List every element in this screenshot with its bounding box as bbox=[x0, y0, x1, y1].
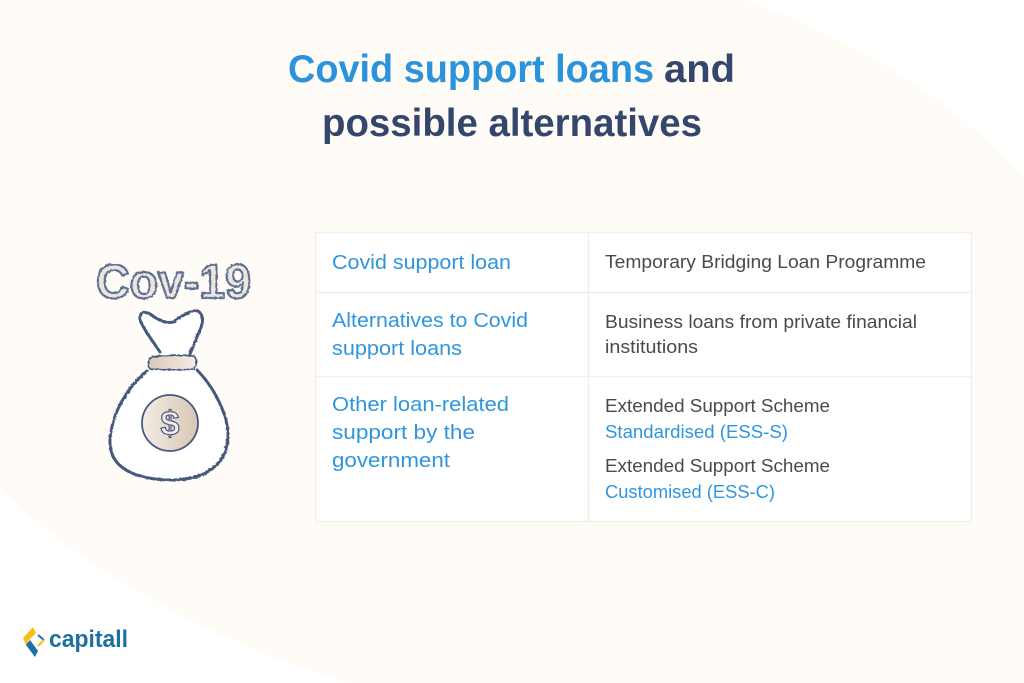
row: other loan-related support bbox=[332, 394, 830, 502]
row: other loan-related support: support by the bbox=[332, 422, 475, 444]
row: other loan-related support: Standardised (ESS-S) bbox=[605, 421, 788, 442]
logo mark bbox=[23, 627, 44, 657]
row: alternatives: Alternatives to Covid bbox=[332, 310, 528, 332]
panel: comparison table bbox=[315, 232, 972, 522]
title: possible alternatives bbox=[322, 102, 702, 145]
row: other loan-related support: Extended Support Scheme bbox=[605, 455, 830, 476]
icon label: Cov-19: Cov-19 bbox=[96, 256, 251, 309]
money bag body bbox=[110, 368, 228, 480]
logo: capitall bbox=[23, 626, 128, 657]
logo wordmark: capitall bbox=[49, 626, 128, 653]
row: Covid support loan: Covid support loan bbox=[332, 252, 511, 274]
row: alternatives bbox=[332, 310, 917, 360]
title: Covid support loans bbox=[288, 48, 654, 91]
dollar coin bbox=[142, 395, 198, 451]
row: other loan-related support: Other loan-related bbox=[332, 394, 509, 416]
title bbox=[288, 48, 735, 145]
icon: Cov-19 money bag bbox=[96, 256, 251, 480]
dollar coin: $ bbox=[161, 405, 180, 443]
money bag neck bbox=[140, 311, 203, 354]
row: alternatives: support loans bbox=[332, 338, 462, 360]
row: alternatives: institutions bbox=[605, 336, 698, 357]
row: Covid support loan: Temporary Bridging Loan Programme bbox=[605, 251, 926, 272]
money bag tie bbox=[148, 355, 196, 370]
row: alternatives: Business loans from private financial bbox=[605, 311, 917, 332]
row: other loan-related support: government bbox=[332, 450, 450, 472]
row: other loan-related support: Customised (ESS-C) bbox=[605, 481, 775, 502]
row: Covid support loan bbox=[332, 251, 926, 274]
title: and bbox=[664, 48, 735, 91]
row: other loan-related support: Extended Support Scheme bbox=[605, 395, 830, 416]
